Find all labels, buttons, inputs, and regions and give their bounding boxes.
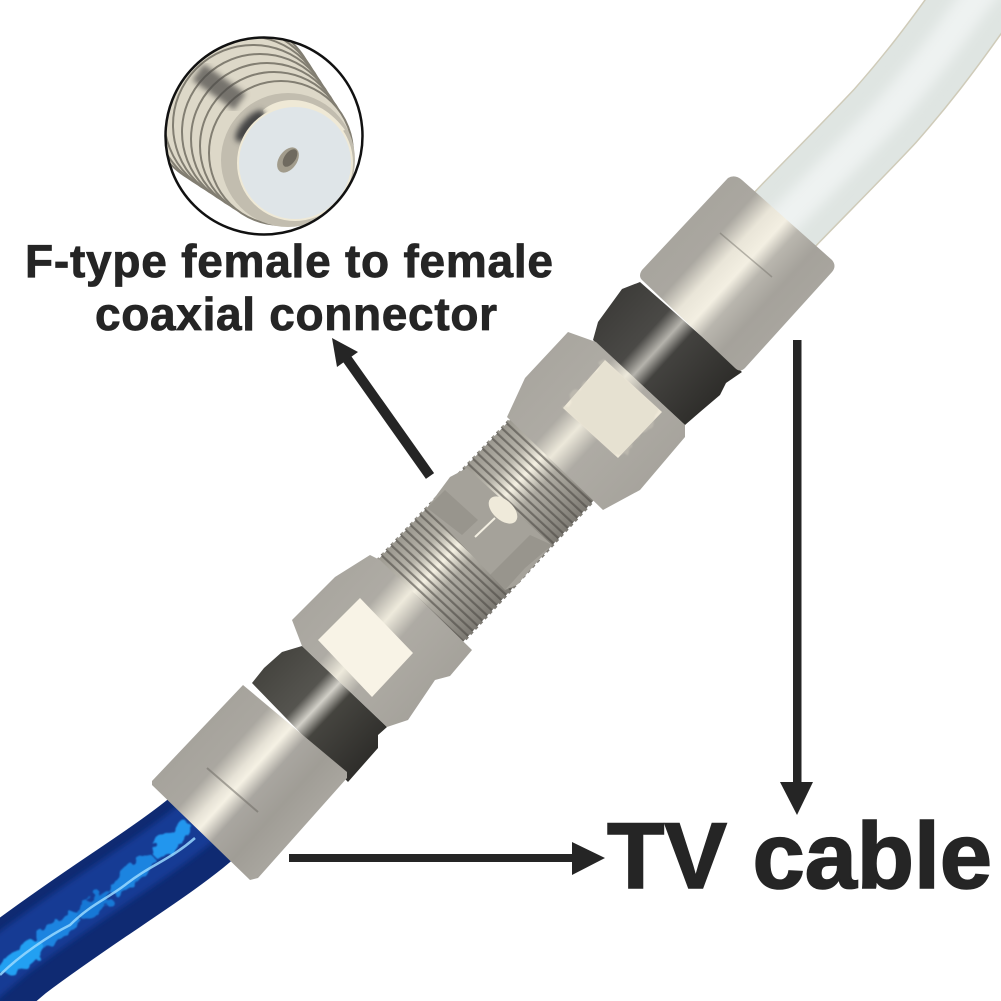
lower crimp ferrule xyxy=(152,685,347,880)
metal thread rings xyxy=(166,38,354,226)
centre contact xyxy=(277,147,299,173)
rim highlight xyxy=(263,100,345,130)
heading: connector label: F-type female to female xyxy=(25,235,553,287)
insulator disc xyxy=(238,106,352,220)
rim dark patch xyxy=(231,106,269,146)
shadow on threads xyxy=(198,72,240,102)
white TV cable xyxy=(770,0,995,235)
upper crimp ferrule xyxy=(640,176,834,370)
front rim xyxy=(221,93,355,227)
threaded barrel of connector xyxy=(370,407,609,644)
heading: connector label: coaxial connector xyxy=(95,288,497,340)
arrow: white cable to TV cable label xyxy=(780,340,813,815)
inset: connector close-up xyxy=(164,36,364,236)
upper hex nut xyxy=(507,332,685,510)
middle hex of connector xyxy=(427,468,552,590)
lower black cable collar xyxy=(252,646,387,782)
arrow: to connector label xyxy=(332,338,430,476)
blue TV cable xyxy=(0,800,230,1000)
arrow: blue cable to TV cable label xyxy=(289,842,605,875)
upper black cable collar xyxy=(593,282,742,425)
heading: TV cable label: TV cable xyxy=(607,803,992,908)
heading: connector label xyxy=(25,235,553,340)
lower hex nut xyxy=(292,555,472,727)
